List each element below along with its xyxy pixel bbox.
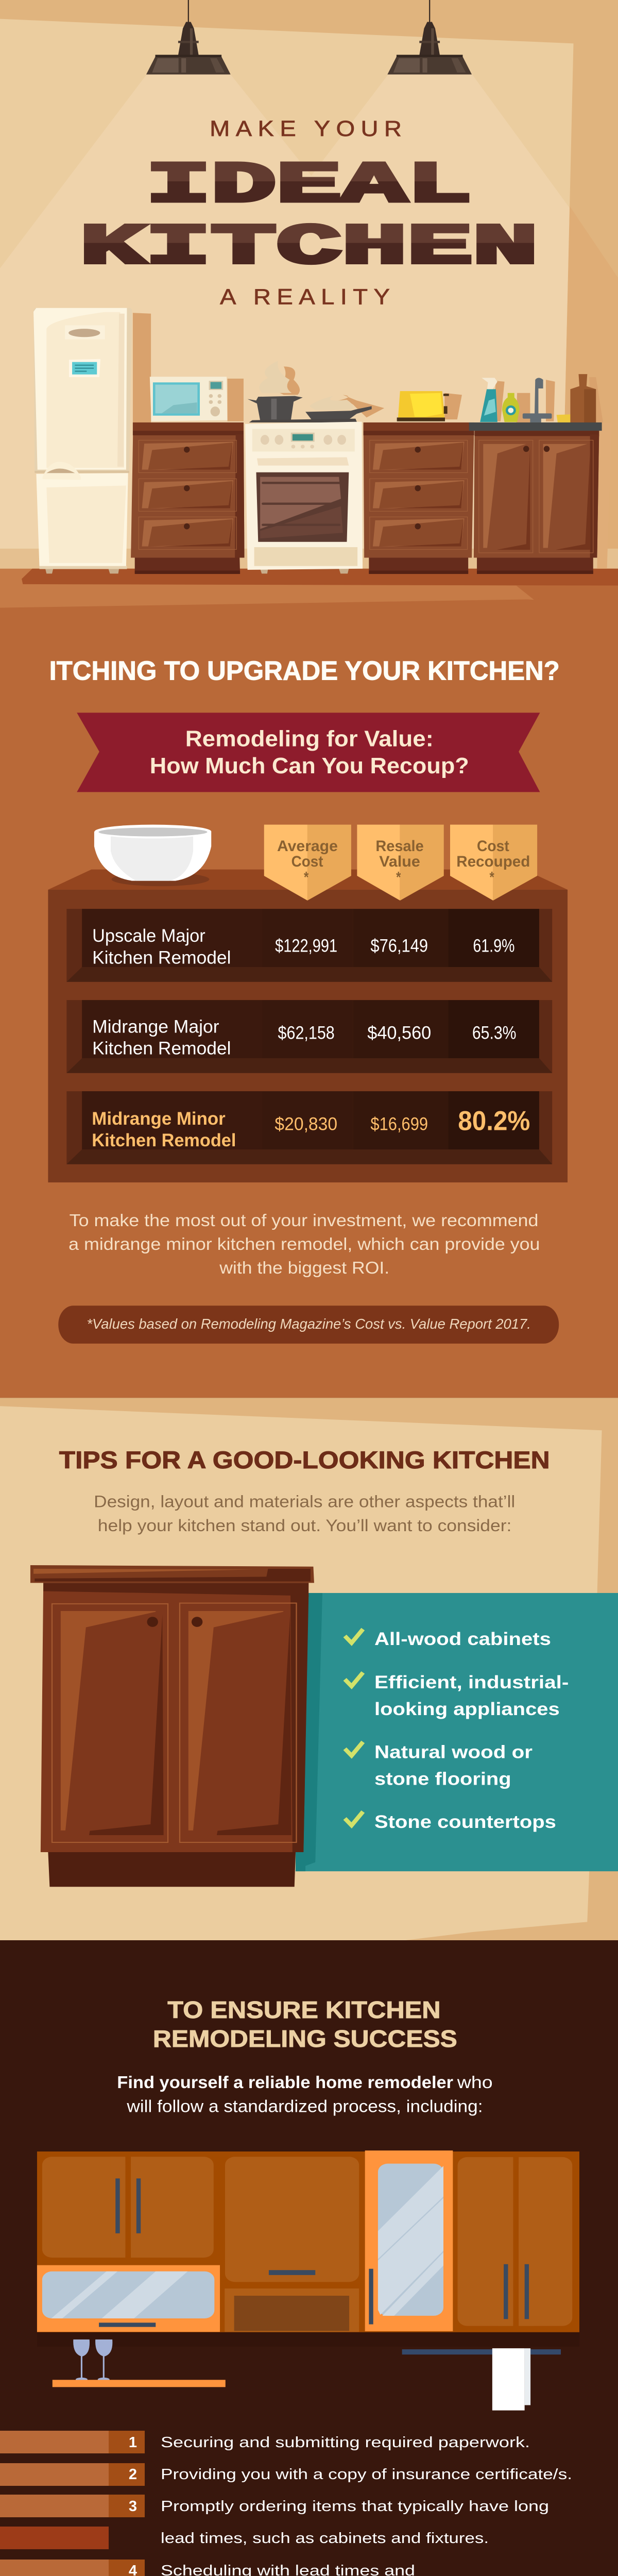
section: itching to upgrade — [0, 592, 618, 1365]
illustration: cutting board — [570, 374, 603, 423]
icon: towel rail — [402, 2348, 561, 2411]
tag: cost recouped: * — [490, 869, 494, 886]
row: midrange major: Kitchen Remodel — [92, 1038, 231, 1058]
intro text: help your kitchen stand out. You’ll want to consider: — [98, 1516, 511, 1535]
title: ideal: IDEAL — [146, 154, 472, 218]
illustration: wall shadow of counter — [597, 422, 612, 569]
tag: resale value: Value — [379, 853, 420, 870]
section: dark remodeling background — [0, 1940, 618, 2576]
row: midrange minor: Kitchen Remodel — [92, 1130, 236, 1150]
recommendation paragraph: To make the most out of your investment, we recommend — [70, 1212, 538, 1230]
item: efficient appliances: Efficient, industrial- — [374, 1672, 569, 1692]
title: a reality: A REALITY — [220, 285, 396, 309]
tag: resale value — [357, 825, 444, 901]
illustration: toaster — [397, 391, 462, 421]
icon: bowl — [94, 825, 211, 886]
item: natural flooring: Natural wood or — [374, 1742, 533, 1762]
step 3 — [0, 2495, 549, 2517]
step 4 — [0, 2560, 415, 2576]
tag: resale value: * — [396, 869, 401, 886]
icon: wine glasses on shelf — [53, 2340, 226, 2387]
illustration: microwave — [150, 377, 244, 421]
illustration: cleaning bottles and faucet — [480, 378, 577, 422]
step 3: 3 — [129, 2498, 137, 2515]
tag: average cost: * — [304, 869, 309, 886]
heading: TIPS FOR A GOOD-LOOKING KITCHEN — [59, 1446, 550, 1473]
illustration: pot and pan with steam — [248, 361, 384, 422]
heading: REMODELING SUCCESS — [153, 2026, 457, 2052]
recommendation paragraph: a midrange minor kitchen remodel, which can provide you — [68, 1235, 540, 1254]
tag: cost recouped — [450, 825, 537, 901]
step 2: 2 — [129, 2466, 137, 2483]
row: midrange major: $40,560 — [367, 1023, 431, 1043]
row: midrange major — [66, 1000, 552, 1073]
ribbon banner: Remodeling for Value: — [185, 726, 434, 751]
item: all-wood cabinets: All-wood cabinets — [374, 1629, 551, 1649]
row: midrange minor: Midrange Minor — [92, 1108, 226, 1129]
step 1: Securing and submitting required paperwork. — [161, 2434, 530, 2451]
row: midrange major: Midrange Major — [92, 1016, 219, 1037]
step 3 continued — [0, 2527, 489, 2549]
row: midrange major: $62,158 — [278, 1023, 335, 1043]
tag: resale value: Resale — [375, 838, 424, 855]
row: upscale major: $122,991 — [275, 935, 337, 956]
section: tips — [0, 1365, 618, 1941]
item: natural flooring: stone flooring — [374, 1769, 511, 1789]
row: midrange minor: 80.2% — [458, 1106, 530, 1137]
row: midrange minor — [66, 1091, 552, 1164]
step 3 continued: lead times, such as cabinets and fixtures. — [161, 2530, 489, 2547]
row: upscale major: 61.9% — [473, 935, 514, 956]
item: natural flooring — [345, 1742, 533, 1789]
row: midrange minor: $16,699 — [370, 1114, 428, 1134]
icon: left pendant lamp — [146, 0, 231, 74]
intro text: Design, layout and materials are other aspects that’ll — [94, 1493, 515, 1511]
floor — [0, 569, 618, 610]
panel: checklist — [296, 1593, 618, 1871]
icon: right pendant lamp — [387, 0, 472, 74]
step 3: Promptly ordering items that typically have long — [161, 2498, 549, 2515]
step 2 — [0, 2463, 572, 2486]
item: efficient appliances: looking appliances — [374, 1699, 560, 1719]
heading — [153, 1996, 457, 2052]
row: upscale major: $76,149 — [370, 935, 428, 956]
illustration: left drawer cabinet — [131, 422, 244, 574]
recommendation paragraph: with the biggest ROI. — [219, 1259, 389, 1278]
heading: ITCHING TO UPGRADE YOUR KITCHEN? — [49, 656, 560, 685]
intro text — [94, 1493, 515, 1535]
intro text: Find yourself a reliable home remodeler — [117, 2073, 453, 2092]
illustration: wooden cabinet — [30, 1565, 314, 1887]
illustration: fridge — [33, 308, 151, 573]
row: midrange minor: $20,830 — [274, 1114, 337, 1134]
row: upscale major: Upscale Major — [92, 925, 205, 946]
step 2: Providing you with a copy of insurance certificate/s. — [161, 2466, 572, 2483]
illustration: stove — [245, 421, 363, 573]
footnote pill: *Values based on Remodeling Magazine’s Cost vs. Value Report 2017. — [87, 1316, 531, 1332]
illustration: upper cabinets — [37, 2150, 579, 2347]
list: remodeling steps — [0, 2431, 572, 2576]
illustration: right drawer cabinet — [364, 422, 474, 574]
row: upscale major: Kitchen Remodel — [92, 947, 231, 968]
ribbon banner: How Much Can You Recoup? — [150, 753, 469, 778]
tag: cost recouped: Cost — [477, 838, 509, 855]
title: make your: MAKE YOUR — [210, 117, 407, 141]
step 1: 1 — [129, 2434, 137, 2451]
recommendation paragraph — [68, 1212, 540, 1278]
title: kitchen: KITCHEN — [80, 215, 538, 280]
intro text: will follow a standardized process, including: — [126, 2097, 483, 2116]
step 1 — [0, 2431, 530, 2453]
hero section — [0, 0, 618, 610]
table shelf — [48, 870, 568, 1182]
heading: TO ENSURE KITCHEN — [167, 1996, 441, 2023]
tag: average cost — [264, 825, 351, 901]
tag: cost recouped: Recouped — [456, 853, 530, 870]
tag: average cost: Cost — [291, 853, 323, 870]
intro text — [117, 2073, 493, 2116]
item: efficient appliances — [345, 1672, 569, 1719]
intro text: who — [457, 2073, 493, 2092]
heading and intro — [37, 1996, 579, 2411]
item: stone countertops: Stone countertops — [374, 1811, 556, 1832]
ribbon banner — [77, 713, 540, 792]
footnote pill — [58, 1306, 559, 1344]
row: midrange major: 65.3% — [472, 1023, 517, 1043]
tag: average cost: Average — [277, 838, 338, 855]
illustration: sink cabinet — [469, 422, 602, 574]
row: upscale major — [66, 909, 552, 982]
